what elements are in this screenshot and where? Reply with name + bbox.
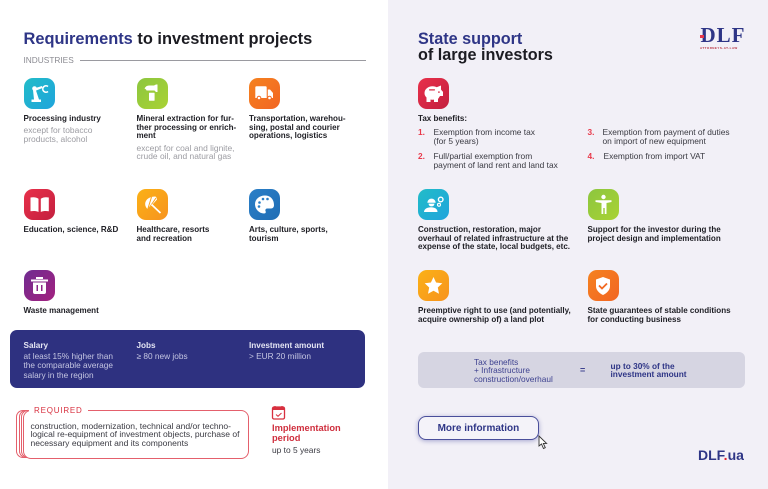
list item 3: 3. [588, 127, 594, 137]
panel: state support background [388, 0, 768, 489]
list item 2: payment of land rent and land tax [434, 160, 558, 170]
text: transportation: Transportation, warehou- [249, 114, 346, 123]
text: healthcare: Healthcare, resorts [136, 225, 209, 234]
list item 3: on import of new equipment [602, 136, 706, 146]
logo: DLF: DLF [700, 23, 746, 47]
list item 2 [418, 151, 558, 170]
text: investment amount: Investment amount [249, 341, 324, 350]
list item 2: Full/partial exemption from [434, 151, 532, 161]
text: salary: Salary [24, 341, 48, 350]
text: support: project design and implementation [588, 234, 721, 243]
text: jobs: ≥ 80 new jobs [136, 350, 188, 360]
text: processing industry: Processing industry [24, 114, 101, 123]
text: formula: Tax benefits [474, 356, 518, 366]
list item 4: Exemption from import VAT [604, 151, 705, 161]
icon: arts palette [249, 189, 280, 220]
icon: star [418, 270, 449, 301]
panel: required [16, 406, 249, 459]
text: implementation period: up to 5 years [272, 445, 320, 455]
text: processing industry [24, 114, 101, 144]
text: construction: Construction, restoration, major [418, 225, 541, 234]
text: education: Education, science, R&D [24, 225, 118, 234]
text: mineral extraction: crude oil, and natural gas [136, 151, 231, 161]
icon: tax benefits piggy bank [418, 78, 449, 108]
heading: industries: INDUSTRIES [24, 55, 74, 65]
text: construction: expense of the state, local budgets, etc. [418, 242, 570, 251]
text: jobs [136, 341, 188, 360]
icon: waste bin [24, 270, 54, 301]
text: implementation period: Implementation [272, 422, 341, 432]
text: equals: = [580, 365, 585, 375]
icon: shield [588, 270, 618, 301]
list item 4: 4. [588, 151, 594, 161]
button: more information: More information [438, 423, 519, 434]
text: preemptive right [418, 306, 571, 324]
text: mineral extraction: ment [136, 131, 156, 140]
text: formula [474, 356, 553, 384]
icon: healthcare beach umbrella [136, 189, 168, 220]
text: jobs: Jobs [136, 341, 156, 350]
text: state guarantees: State guarantees of stable conditions [588, 306, 731, 315]
text: formula: construction/overhaul [474, 374, 553, 384]
text: implementation period [272, 422, 341, 455]
text: waste management: Waste management [24, 306, 99, 315]
text: mineral extraction: ther processing or enrich- [136, 123, 236, 132]
panel: criteria [10, 330, 364, 388]
text: salary [24, 341, 113, 380]
text: construction [418, 225, 570, 251]
text: preemptive right: acquire ownership of) a land plot [418, 315, 544, 324]
text: required description [30, 420, 240, 448]
list item 3: Exemption from payment of duties [602, 127, 730, 137]
title: requirements: Requirements to investment projects [24, 30, 312, 48]
text: result [610, 361, 687, 379]
button: more information [418, 416, 539, 440]
text: required description: necessary equipment and its components [30, 438, 188, 448]
title: state support: State support [418, 30, 522, 48]
text: construction: overhaul of related infrastructure at the [418, 234, 568, 243]
text: mineral extraction [136, 114, 236, 161]
text: investment amount [249, 341, 324, 360]
logo: DLF: ATTORNEYS-AT-LAW [700, 46, 738, 50]
text: result: investment amount [610, 369, 687, 379]
text: salary: salary in the region [24, 370, 94, 380]
icon: support person [588, 188, 618, 220]
panel: total benefit [418, 352, 745, 388]
text: investment amount: > EUR 20 million [249, 350, 311, 360]
icon: calendar [272, 406, 286, 420]
text: transportation: operations, logistics [249, 131, 327, 140]
icon: education book [24, 189, 54, 220]
text: processing industry: products, alcohol [24, 134, 87, 144]
text: processing industry: except for tobacco [24, 125, 92, 135]
text: mineral extraction: Mineral extraction for fur- [136, 114, 234, 123]
title: state support [418, 30, 553, 64]
text: formula: + Infrastructure [474, 365, 530, 375]
text: arts: tourism [249, 234, 279, 243]
heading: required: REQUIRED [34, 406, 83, 414]
text: state guarantees [588, 306, 731, 324]
logo: DLF.ua: DLF.ua [698, 446, 744, 462]
text: result: up to 30% of the [610, 361, 675, 371]
text: arts: Arts, culture, sports, [249, 225, 328, 234]
icon: mineral extraction hammer [136, 78, 168, 108]
text: transportation: sing, postal and courier [249, 123, 340, 132]
text: tax benefits: Tax benefits: [418, 114, 467, 123]
icon: cursor [538, 435, 548, 450]
text: salary: the comparable average [24, 360, 113, 370]
list item 3 [588, 127, 730, 146]
list item 1: 1. [418, 127, 425, 137]
text: transportation [249, 114, 346, 140]
icon: transportation truck [249, 78, 280, 108]
text: healthcare: and recreation [136, 234, 192, 243]
text: healthcare [136, 225, 209, 243]
text: arts [249, 225, 328, 243]
title: state support: of large investors [418, 46, 553, 64]
text: required description: construction, modernization, technical and/or techno- [30, 420, 231, 430]
text: support [588, 225, 721, 243]
text: state guarantees: for conducting business [588, 315, 681, 324]
text: mineral extraction: except for coal and lignite, [136, 143, 235, 153]
icon: construction worker [418, 188, 449, 220]
text: required description: logical re-equipment of investment objects, purchase of [30, 429, 240, 439]
text: implementation period: period [272, 433, 300, 443]
text: support: Support for the investor during the [588, 225, 721, 234]
text: salary: at least 15% higher than [24, 350, 113, 360]
list item 2: 2. [418, 151, 425, 161]
list item 1: (for 5 years) [434, 136, 479, 146]
text: preemptive right: Preemptive right to use (and potentially, [418, 306, 571, 315]
list item 1: Exemption from income tax [434, 127, 535, 137]
list item 1 [418, 127, 535, 146]
icon: processing industry robot arm [24, 78, 54, 108]
